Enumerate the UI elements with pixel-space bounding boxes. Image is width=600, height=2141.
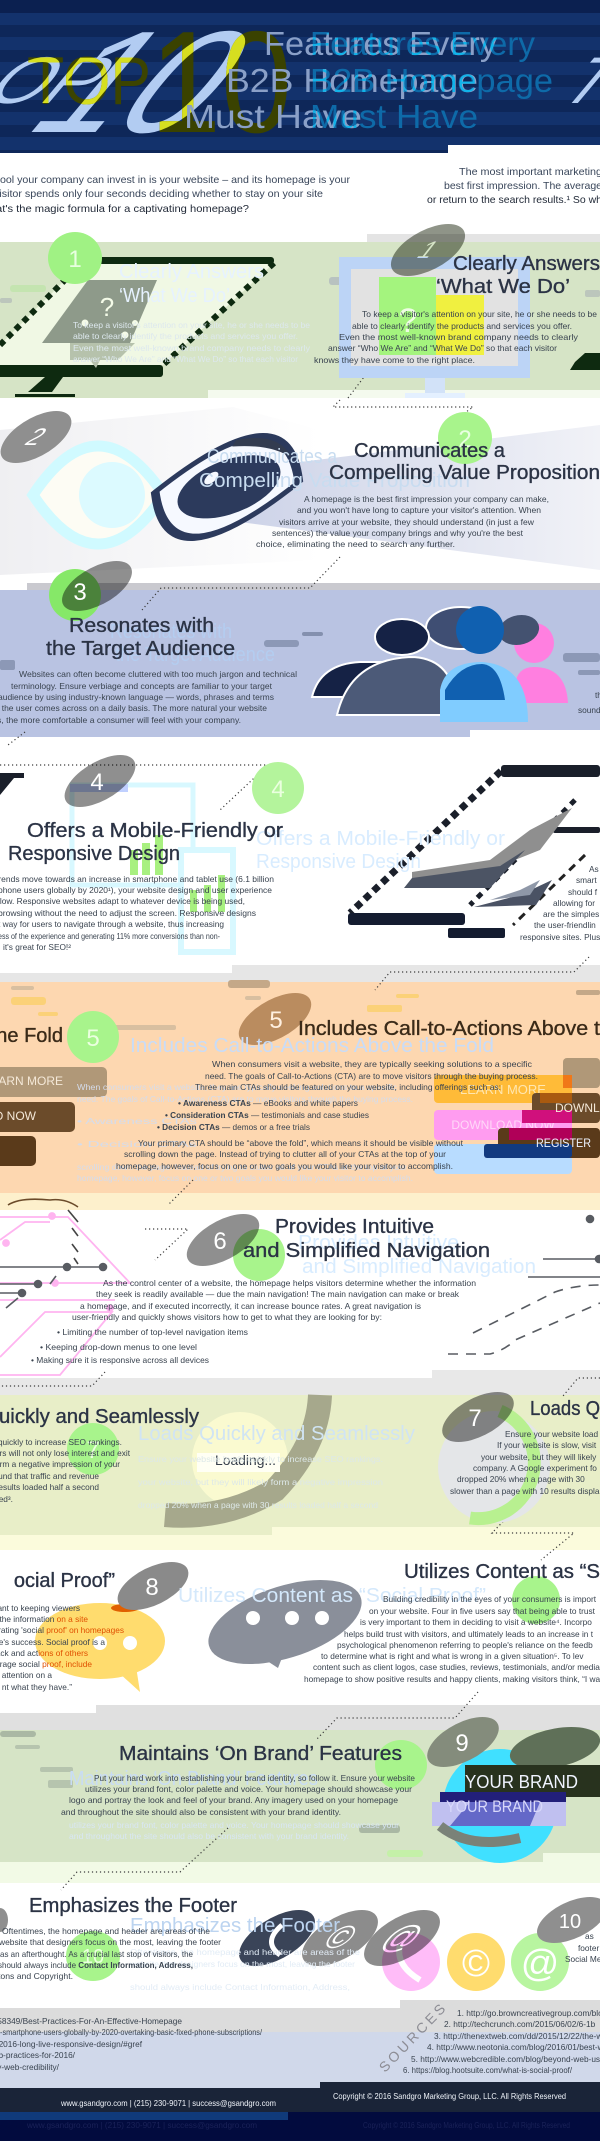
panel 4: number badges: 4 [90, 769, 104, 796]
panel 8: body text: to determine what is right and what is wrong in a given situation⁵. To lev [321, 1651, 584, 1661]
panel 2: ghost eye icon [33, 446, 164, 544]
panel 10: number badges [0, 1897, 600, 1981]
panel 8: body text: nt what they have.” [2, 1682, 72, 1692]
panel 6: heading: and Simplified Navigation [243, 1240, 490, 1262]
header: top 10 numerals: 10 [0, 0, 296, 163]
panel 2: heading: Communicates a [354, 440, 506, 462]
footer text [26, 2091, 570, 2130]
panel 5: body text: • Consideration CTAs — testimonials and case studies [165, 1110, 369, 1120]
panel 10: body text: should always include Contact Information, Address, [0, 1960, 193, 1970]
footer text: Copyright © 2016 Sandgro Marketing Group, LLC. All Rights Reserved [333, 2091, 566, 2101]
panel 7: loading spinner illustration: Loading... [215, 1453, 276, 1468]
panel 1: body text: answer “Who We Are” and “What We Do” so that each visitor [73, 354, 298, 364]
panel 10: heading [29, 1895, 340, 1937]
panel 5: body text: • Awareness CTAs — eBooks and white papers [178, 1098, 358, 1108]
panel 4: heading: Responsive Design [8, 843, 180, 865]
panel 7: body text: dropped 20% when a page with 30 [457, 1474, 585, 1484]
panel 6: heading [243, 1216, 536, 1278]
panel 3: body text: terminology. Ensure verbiage and concepts are familiar to your target [11, 681, 273, 691]
panel 7: body text: Ensure your website load [505, 1429, 599, 1439]
header: title text: Must Have [184, 98, 362, 135]
panel 4: body text: should f [568, 887, 598, 897]
panel 7: body text: your website, but they will likely [481, 1452, 597, 1462]
header: top 10 numerals [0, 30, 600, 134]
panel 1: dark monitor illustration: ? [100, 292, 114, 322]
panel 7: body text: company. A Google experiment fo [473, 1463, 597, 1473]
panel 8: body text: the information on a site [0, 1614, 88, 1624]
header: top 10 numerals: 10 [150, 1, 292, 163]
sources list [0, 2001, 600, 2075]
panel 6: body text: user-friendly and quickly shows visitors how to get to what they are looking for by: [72, 1312, 382, 1322]
panel 5: body text [77, 1059, 538, 1183]
panel 6: number badges [173, 1214, 285, 1281]
panel 3: heading: Resonates with [69, 615, 214, 637]
header: top 10 numerals: TOP [27, 43, 151, 119]
panel 5: heading: Includes Call-to-Actions Above t [298, 1018, 600, 1040]
panel 10: body text: as an afterthought. As a crucial last stop of visitors, the [0, 1949, 193, 1959]
intro paragraph [0, 167, 600, 215]
panel 1: number badge grey [377, 224, 479, 276]
header: title text: Must Have [184, 98, 362, 135]
panel 5: body text: Your primary CTA should be “above the fold”, which means it should be visible without [138, 1138, 464, 1148]
sources list: b-practices-for-2016/ [0, 2050, 76, 2060]
panel 6: body text: As the control center of a website, the homepage helps visitors determine whether the information [103, 1278, 476, 1288]
panel 10: body text: as [585, 1931, 594, 1941]
panel 1: body text: Even the most well-known brand company needs to clearly [339, 332, 579, 342]
panel 4: body text: t way for users to navigate through a website, thus increasing [0, 919, 224, 929]
panel 5: body text: scrolling down the page. Instead of trying to clutter all of your CTAs at the top of your [77, 1162, 407, 1172]
panel 8: heading: ocial Proof” [14, 1570, 115, 1592]
panel 1: ghost monitor illustration: ? [399, 302, 417, 340]
panel 9: brand circle icon [432, 1727, 600, 1863]
panel 7: ghost loading ring [438, 1411, 550, 1523]
panel 9: body text: and throughout the site should also be consistent with your brand identity. [61, 1807, 341, 1817]
header: title text: B2B Homepage [310, 62, 553, 99]
panel 8: number badges [104, 1562, 560, 1624]
panel 1: number badge grey: 1 [411, 236, 446, 263]
panel 5: body text: When consumers visit a website, they are typically seeking solutions to a specific [212, 1059, 532, 1069]
panel 7: number badges: 7 [86, 1437, 100, 1464]
panel 1: heading: ‘What We Do’ [436, 276, 570, 298]
panel 7: body text: und that traffic and revenue [0, 1471, 99, 1481]
panel 3: people icon [312, 606, 568, 722]
panel 6: body text: a homepage, and if executed incorrectly, it can increase bounce rates. A great navigation is [80, 1301, 421, 1311]
header: title text: B2B Homepage [226, 62, 478, 99]
panel 10: heading: Emphasizes the Footer [29, 1895, 237, 1917]
panel 8: yellow speech bubble [35, 1603, 165, 1692]
panel 7: heading: Loads Quickly and Seamlessly [138, 1423, 415, 1445]
panel 5: coloured call-to-action buttons: LEARN MORE [460, 1082, 546, 1097]
panel 9: number badges [375, 1717, 513, 1790]
panel 1: body text: answer “Who We Are” and “What We Do” so that each visitor [328, 343, 557, 353]
panel 5: coloured call-to-action buttons: DOWNLOAD NOW [451, 1118, 555, 1132]
panel 2: body text: sentences) the value your company brings and why you're the best [272, 528, 524, 538]
panel 5: body text: • Decision CTAs — demos or a free trials [157, 1122, 310, 1132]
header: title text: Features Every [310, 25, 536, 62]
panel 9: number badges: 9 [455, 1730, 469, 1757]
panel 5: body text: • Decision CTAs [77, 1139, 197, 1149]
panel 7: body text: If your website is slow, visit [497, 1440, 597, 1450]
panel 5: number badges: 5 [86, 1025, 100, 1052]
panel 4: number badges: 4 [271, 776, 285, 803]
panel 8: heading: Utilizes Content as “S [404, 1561, 600, 1583]
panel 9: heading [69, 1743, 402, 1790]
header: top 10 numerals: TOP [27, 43, 151, 119]
panel 4: body text: the user-friendlin [534, 920, 596, 930]
panel 1: body text: To keep a visitor's attention on your site, he or she needs to be [73, 320, 310, 330]
panel 7: number badges: 7 [468, 1405, 482, 1432]
panel 8: body text: Building credibility in the eyes of your consumers is import [383, 1594, 597, 1604]
panel 1: body text [73, 309, 597, 365]
panel 10: coloured contact icons [382, 1933, 569, 1991]
panel 2: body text: and you won't have long to capture your visitor's attention. When [297, 505, 541, 515]
panel 9: body text: utilizes your brand font, color palette and voice. Your homepage should showcase your [85, 1784, 412, 1794]
panel 9: body text: logo and portray the look and feel of your brand. Any imagery used on your homepage [69, 1795, 398, 1805]
panel 4: body text: responsive sites. Plus [520, 932, 600, 942]
panel 8: body text: content such as client logos, case studies, reviews, testimonials, and/or media [313, 1662, 600, 1672]
panel 10: body text: website that designers focus on the most, leaving the footer [129, 1959, 355, 1969]
footer text: www.gsandgro.com | (215) 230-9071 | success@gsandgro.com [26, 2120, 257, 2130]
panel 7: body text: slower than a page with 10 results displa [450, 1486, 600, 1496]
panel 1: body text: able to clearly identify the products and services you offer. [73, 331, 298, 341]
panel 9: body text: and throughout the site should also be consistent with your brand identity. [69, 1831, 349, 1841]
panel 6: body text: • Making sure it is responsive across all devices [31, 1355, 209, 1365]
intro paragraph: The most important marketing [459, 167, 600, 178]
panel 3: body text: t the user comes across on a daily basis. The more natural your website [0, 703, 267, 713]
panel 7: body text: dropped 20% when a page with 30 results loaded half a second [138, 1500, 378, 1510]
panel 1: dark monitor illustration [0, 257, 600, 397]
panel 8: body text: helps build trust with visitors, and ultimately leads to an increase in t [344, 1629, 594, 1639]
panel 3: heading: the Target Audience [46, 638, 235, 660]
panel 9: body text [61, 1773, 415, 1841]
panel 4: body text: allowing for [553, 898, 595, 908]
panel 4: heading [8, 820, 505, 873]
intro paragraph: tool your company can invest in is your website – and its homepage is your [0, 175, 351, 186]
header: title text: Features Every [264, 25, 498, 62]
panel 8: body text: rating 'social proof' on homepages [0, 1625, 124, 1635]
panel 2: heading: Communicates a [207, 446, 338, 468]
panel 3: body text: s, the more comfortable a consumer will feel with your company. [0, 715, 241, 725]
panel 7: loading spinner illustration [165, 1395, 320, 1516]
panel 9: heading: Maintains ‘On Brand’ Features [119, 1743, 402, 1765]
sources list: SOURCES [376, 2001, 448, 2075]
panel 4: body text [0, 864, 600, 952]
panel 4: ghost tablet and phone [70, 784, 233, 952]
panel 7: heading: uickly and Seamlessly [0, 1406, 199, 1428]
panel 4: heading: Offers a Mobile-Friendly or [256, 828, 505, 850]
panel 10: sheared grey icons [224, 1910, 455, 1966]
panel 1: ghost monitor illustration [345, 263, 524, 398]
panel 10: sheared grey icons: @ [372, 1919, 433, 1955]
panel 7: body text [0, 1429, 600, 1510]
panel 4: body text: phone users globally by 2020¹), your website design and user experience [0, 885, 272, 895]
footer text: www.gsandgro.com | (215) 230-9071 | success@gsandgro.com [60, 2098, 276, 2108]
panel 9: brand circle icon: YOUR BRAND [446, 1797, 543, 1816]
panel 8: heading [14, 1561, 600, 1607]
panel 8: heading: Utilizes Content as “Social Proof” [178, 1585, 486, 1607]
intro paragraph: best first impression. The average [444, 181, 600, 192]
intro paragraph: at's the magic formula for a captivating homepage? [0, 204, 249, 215]
panel 10: heading: Emphasizes the Footer [130, 1915, 340, 1937]
panel 9: body text: Put your hard work into establishing your brand identity, so follow it. Ensure your website [94, 1773, 415, 1783]
panel 2: heading: Compelling Value Proposition [199, 470, 470, 492]
panel 8: grey speech bubble [182, 1580, 388, 1668]
header: title text [187, 32, 552, 128]
panel 5: heading [0, 1018, 600, 1057]
sources list: 2. http://techcrunch.com/2015/06/02/6-1b [444, 2019, 596, 2029]
intro paragraph: or return to the search results.¹ So wh [427, 195, 600, 206]
panel 6: number badges: 6 [213, 1228, 227, 1255]
panel 1: number badge green [48, 232, 102, 284]
panel 10: body text: footer [578, 1943, 599, 1953]
panel 5: body text: homepage, however, focus on one or two goals you would like your visitor to accomplish. [77, 1173, 413, 1183]
panel 10: number badges: 10 [82, 1946, 104, 1968]
panel 9: heading: Maintains ‘On Brand’ Features [69, 1768, 318, 1790]
panel 6: dark navigation chart [0, 1199, 600, 1354]
panel 10: coloured contact icons: © [462, 1943, 490, 1985]
panel 6: body text: they seek is readily available — due the main navigation! The main navigation can make or break [96, 1289, 460, 1299]
panel 4: body text: ess of the experience and generating 11% more conversions than non- [0, 931, 220, 941]
header: title text: B2B Homepage [226, 62, 478, 99]
panel 4: body text: are the simples [543, 909, 599, 919]
panel 7: body text: Ensure your website loads quickly to increase SEO rankings. [138, 1454, 383, 1464]
panel 8: body text: psychological phenomenon referring to people's reliance on the feedb [337, 1640, 593, 1650]
panel 10: body text: Oftentimes, the homepage and header are areas of the [130, 1947, 360, 1957]
sources list: 6. https://blog.hootsuite.com/what-is-social-proof/ [403, 2065, 573, 2075]
panel 5: body text: need. The goals of Call-to-Actions (CTA) are to move visitors through the buying process. [205, 1071, 538, 1081]
panel 3: heading: Resonates with [110, 621, 232, 643]
panel 1: heading: ‘What We Do’ [119, 285, 230, 307]
panel 1: body text: knows they have come to the right place. [314, 355, 475, 365]
panel 4: body text: llow. Responsive websites adapt to whatever device is being used, [0, 896, 245, 906]
panel 5: body text: need. The goals of Call-to-Actions (CTA) are to move visitors through the buying process. [77, 1094, 413, 1104]
panel 10: sheared grey icons: © [315, 1919, 367, 1955]
panel 2: dark eye icon [125, 432, 329, 542]
panel 10: coloured contact icons: @ [521, 1943, 559, 1985]
panel 9: body text: utilizes your brand font, color palette and voice. Your homepage should showcase your [69, 1820, 399, 1830]
panel 1: body text: Even the most well-known brand company needs to clearly [73, 343, 311, 353]
intro paragraph: visitor spends only four seconds deciding whether to stay on your site [0, 189, 323, 200]
panel 6: body text: • Keeping drop-down menus to one level [40, 1342, 197, 1352]
connector: dotted path between sections [0, 377, 600, 1890]
panel 5: body text: Three main CTAs should be featured on your website, including offerings such as: [195, 1082, 501, 1092]
header: title text: Must Have [310, 98, 478, 135]
panel 4: body text: browsing without the need to adjust the screen. Responsive designs [0, 908, 256, 918]
panel 8: body text: attention on a [2, 1670, 52, 1680]
panel 8: body text [0, 1594, 600, 1692]
panel 7: number badges [67, 1392, 528, 1475]
panel 10: body text: should always include Contact Information, Address, [130, 1982, 350, 1992]
panel 3: heading [46, 615, 275, 666]
header: title text: Features Every [264, 25, 498, 62]
panel 2: body text: choice, eliminating the need to search any further. [256, 539, 455, 549]
panel 2: body text: A homepage is the best first impression your company can make, [304, 494, 549, 504]
panel 4: body text: smart [576, 875, 597, 885]
panel 3: heading: the Target Audience [115, 644, 275, 666]
sources list: -smartphone-users-globally-by-2020-overtaking-basic-fixed-phone-subscriptions/ [0, 2027, 263, 2037]
panel 2: number badges: 2 [19, 423, 54, 450]
panel 4: body text: As [589, 864, 599, 874]
panel 7: body text: your website, but they will likely form a negative impression [138, 1477, 383, 1487]
panel 5: body text: homepage, however, focus on one or two goals you would like your visitor to accomplish. [116, 1161, 453, 1171]
panel 10: body text [0, 1926, 600, 1992]
panel 3: body text: Websites can often become cluttered with too much jargon and technical [19, 669, 297, 679]
panel 4: dark tablet with chart [0, 765, 600, 938]
panel 2: body text: visitors arrive at your website, they should understand (in just a few [279, 517, 535, 527]
panel 9: brand circle icon: YOUR BRAND [465, 1772, 578, 1792]
panel 2: body text [256, 494, 549, 549]
panel 4: body text: trends move towards an increase in smartphone and tablet use (6.1 billion [0, 874, 274, 884]
panel 5: number badges: 5 [269, 1007, 283, 1034]
panel 5: number badges [67, 993, 325, 1063]
panel 3: body text: audience by using industry-known language — words, phrases and terms [0, 692, 274, 702]
panel 8: body text: is very important to them in deciding to visit a website⁴. Incorpo [360, 1617, 592, 1627]
panel 3: body text [0, 669, 600, 725]
panel 7: heading [0, 1398, 600, 1445]
panel 4: body text: it's great for SEO!² [3, 942, 71, 952]
panel 10: number badges: 10 [559, 1911, 581, 1933]
panel 10: body text: website that designers focus on the most, leaving the footer [0, 1937, 221, 1947]
panel 1: heading: Clearly Answers [453, 253, 600, 275]
panel 1: heading: Clearly Answers [119, 261, 264, 283]
panel 6: ghost pink navigation chart [0, 1213, 130, 1375]
panel 5: brown call-to-action buttons [0, 1058, 600, 1166]
panel 3: number badges: 3 [73, 579, 87, 606]
panel 8: number badges: 8 [145, 1574, 159, 1601]
panel 1: heading [119, 253, 600, 307]
panel 4: number badges [51, 755, 304, 814]
panel 2: heading: Compelling Value Proposition [329, 462, 600, 484]
panel 10: body text: Oftentimes, the homepage and header are areas of the [2, 1926, 210, 1936]
panel 6: heading: Provides Intuitive [298, 1232, 459, 1254]
panel 3: number badges [48, 561, 146, 621]
panel 10: body text: tons and Copyright. [0, 1971, 73, 1981]
panel 3: body text: sound [578, 705, 600, 715]
panel 4: heading: Offers a Mobile-Friendly or [27, 820, 283, 842]
panel 5: brown call-to-action buttons: REGISTER [536, 1136, 591, 1150]
panel 5: body text: When consumers visit a website, they are typically seeking solutions to a specific [77, 1082, 397, 1092]
panel 2: heading [199, 440, 600, 492]
header: top 10 numerals: 10 [150, 1, 292, 163]
panel 6: heading: and Simplified Navigation [302, 1256, 536, 1278]
panel 1: body text: To keep a visitor's attention on your site, he or she needs to be [362, 309, 597, 319]
panel 2: number badges [0, 411, 492, 464]
panel 1: number badge green: 1 [68, 246, 82, 273]
panel 6: body text [31, 1278, 476, 1365]
panel 1: body text: able to clearly identify the products and services you offer. [352, 321, 572, 331]
panel 8: body text: on your website. Four in five users say that being able to trust [369, 1606, 596, 1616]
panel 2: number badges: 2 [458, 426, 472, 453]
panel 8: body text: homepage to show positive results and happy clients, making visitors think, “I wa [304, 1674, 600, 1684]
panel 5: body text: • Awareness CTAs [77, 1116, 197, 1126]
panel 5: body text: scrolling down the page. Instead of trying to clutter all of your CTAs at the top of your [124, 1149, 446, 1159]
panel 5: coloured call-to-action buttons [434, 1075, 572, 1174]
panel 5: heading: Includes Call-to-Actions Above the Fold [130, 1035, 494, 1057]
panel 6: heading: Provides Intuitive [275, 1216, 434, 1238]
decorative clouds [0, 277, 600, 1857]
panel 6: body text: • Limiting the number of top-level navigation items [57, 1327, 248, 1337]
panel 4: heading: Responsive Design [256, 851, 421, 873]
